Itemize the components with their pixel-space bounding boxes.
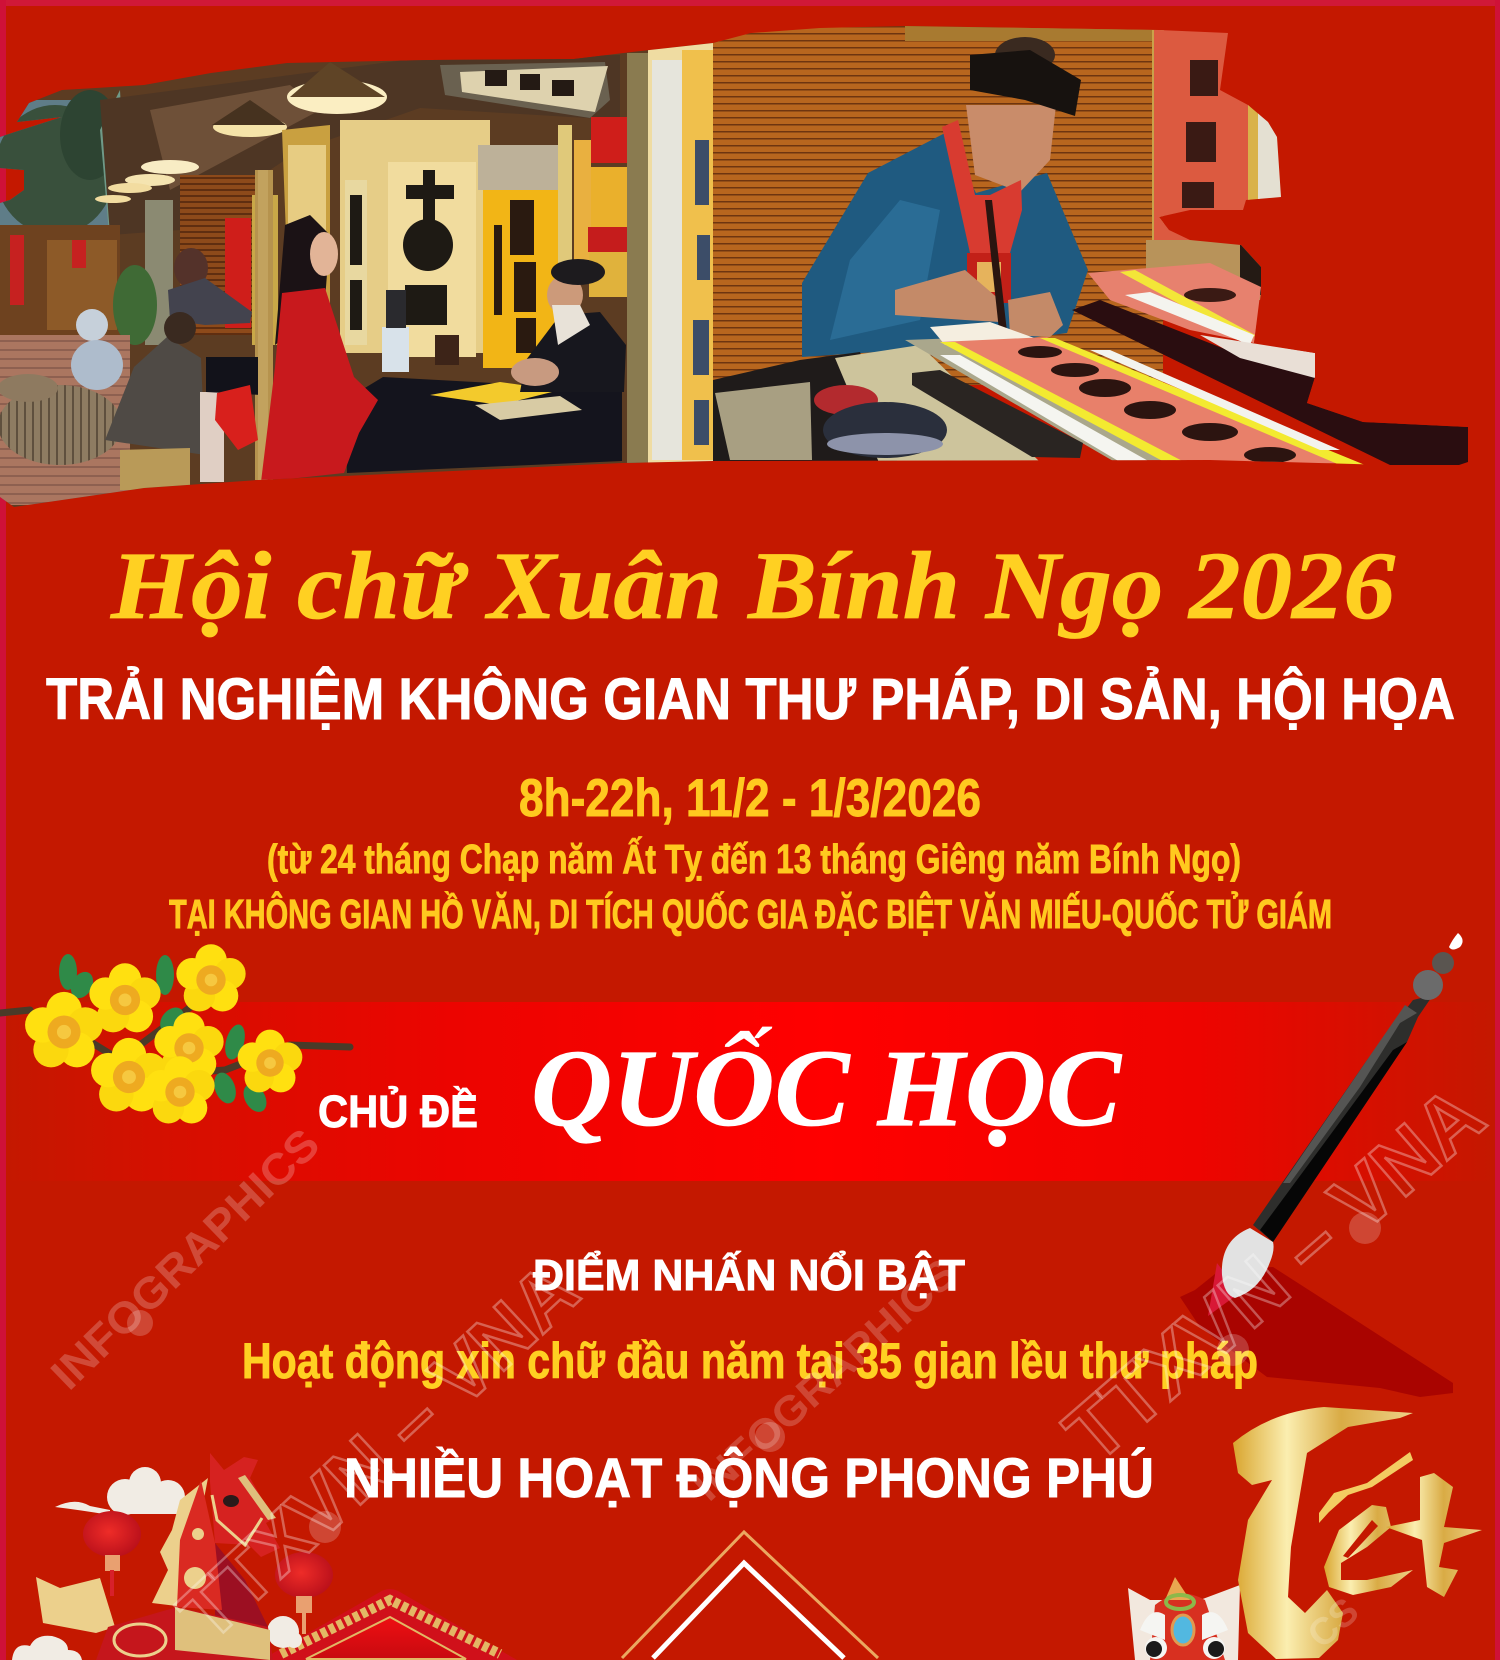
panel: header photos: [0, 25, 1468, 510]
head: [210, 1453, 280, 1557]
watermark: INFOGRAPHICS centre: INFOGRAPHICS: [684, 1249, 965, 1510]
highlight: calligraphy tents: Hoạt động xin chữ đầu năm tại 35 gian lều thư pháp: [242, 1333, 1258, 1389]
icon: golden calligraphy Tet: [1233, 1407, 1482, 1659]
watermark globes: [127, 1212, 1381, 1543]
body: [96, 1607, 273, 1660]
watermark: INFOGRAPHICS fragment lower right: CS: [1300, 1590, 1367, 1657]
woman seen from behind: [168, 248, 252, 325]
watermark: TTXVN VNA right: TTXVN – VNA: [1048, 1069, 1500, 1480]
ink dishes: [814, 385, 947, 458]
icon: calligraphy brush: [1208, 933, 1463, 1316]
cloud right: [267, 1616, 302, 1648]
stack of paper: [1072, 263, 1468, 465]
highlights heading: ĐIỂM NHẤN NỔI BẬT: [533, 1249, 965, 1300]
event time: 8h-22h, 11/2 - 1/3/2026: [519, 769, 981, 828]
woman in red ao dai: [261, 215, 378, 482]
icon: lion dance head: [1128, 1577, 1240, 1660]
hands: [895, 270, 1000, 322]
head with turban: [966, 37, 1081, 192]
theme name: QUỐC HỌC: [531, 1027, 1123, 1149]
icon: apricot blossom branch: [0, 944, 350, 1124]
lanyard: [942, 120, 1022, 253]
theme label: CHỦ ĐỀ: [318, 1086, 478, 1137]
left lantern: [83, 1511, 141, 1596]
photo: calligrapher writing: [713, 25, 1468, 470]
cloud bottom left: [12, 1636, 82, 1660]
icon: ink stroke shadow: [1180, 1267, 1453, 1397]
blue robe: [802, 133, 1088, 357]
icon: diamond frame: [622, 1532, 878, 1658]
right lantern: [275, 1552, 333, 1634]
table: [345, 377, 622, 473]
red card with meander border: [261, 1589, 517, 1660]
ink stick: [912, 370, 1083, 458]
wing: [36, 1577, 115, 1633]
icon: paper horse with lanterns and clouds: [12, 1453, 333, 1660]
seated man: [105, 312, 224, 490]
photo: calligrapher stall: [0, 30, 720, 510]
lunar calendar dates: (từ 24 tháng Chạp năm Ất Tỵ đến 13 tháng Giêng năm Bính Ngọ): [267, 836, 1241, 882]
old calligrapher: [511, 259, 626, 392]
mane: [152, 1478, 208, 1607]
theme banner: [6, 1002, 1495, 1181]
notebook: [715, 382, 812, 460]
activities heading: NHIỀU HOẠT ĐỘNG PHONG PHÚ: [344, 1446, 1154, 1509]
cloud top: [55, 1467, 185, 1515]
neck back: [215, 1543, 268, 1627]
title: Hội chữ Xuân Bính Ngọ 2026: [110, 532, 1395, 639]
paper with calligraphy: [930, 322, 1365, 465]
watermark: TTXVN VNA left: TTXVN – VNA: [162, 1245, 595, 1657]
neck front: [177, 1480, 222, 1610]
watermark: INFOGRAPHICS: INFOGRAPHICS: [42, 1119, 329, 1399]
